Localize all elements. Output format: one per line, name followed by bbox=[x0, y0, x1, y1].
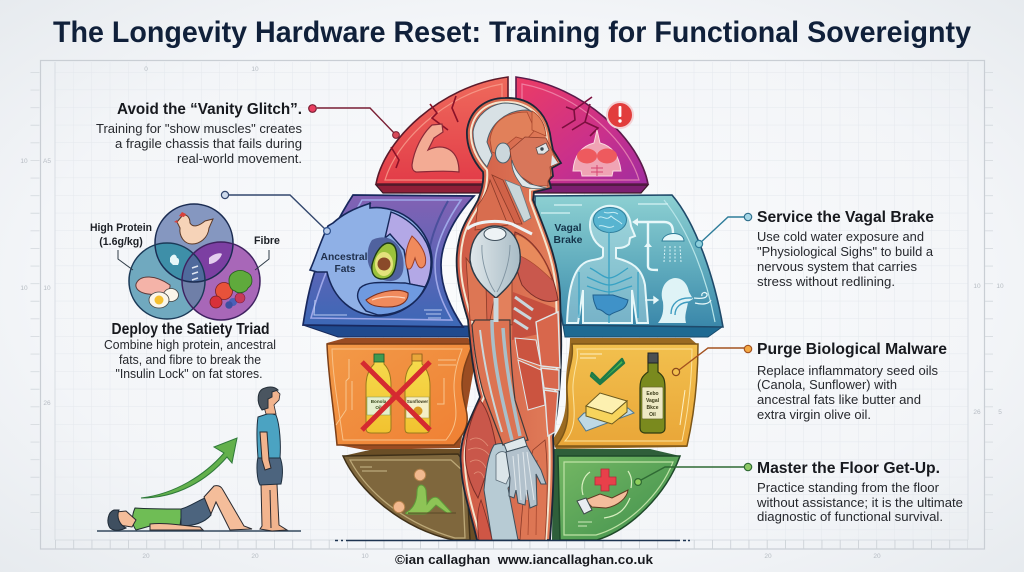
label: Vagal Brake: Vagal bbox=[554, 223, 582, 234]
text block: biological malware: (Canola, Sunflower) with bbox=[757, 378, 897, 392]
panel: vagal brake bbox=[535, 195, 723, 337]
decorative highlight strokes bbox=[314, 300, 442, 318]
connector: biological malware bbox=[672, 345, 752, 376]
icon: cracks in magenta dome bbox=[562, 97, 598, 136]
text block: biological malware bbox=[757, 341, 947, 422]
text block: vagal brake bbox=[757, 209, 934, 289]
text block: floor get-up: Master the Floor Get-Up. bbox=[757, 460, 940, 477]
icon: overlap glyphs bbox=[170, 255, 179, 265]
decorative highlight strokes bbox=[360, 467, 387, 471]
background: engineering grid panel: 10 bbox=[251, 66, 259, 73]
standing person bbox=[257, 387, 287, 531]
panel: vanity glitch dome, left bbox=[376, 77, 508, 193]
icon: avocado bbox=[372, 243, 397, 279]
title: The Longevity Hardware Reset: Training for Functional Sovereignty bbox=[53, 16, 972, 49]
text block: vagal brake: nervous system that carries bbox=[757, 260, 917, 274]
panel: seed oils bbox=[327, 338, 478, 450]
text block: vanity glitch: Avoid the “Vanity Glitch”. bbox=[117, 101, 302, 118]
text block: vanity glitch: a fragile chassis that fails during bbox=[115, 137, 302, 151]
illustration: floor get-up bbox=[97, 387, 301, 531]
arm: upper arm muscles bbox=[466, 258, 487, 322]
label: Vagal Brake bbox=[554, 223, 583, 246]
icon: butter bbox=[578, 393, 634, 431]
neck: tendons bbox=[492, 175, 522, 224]
text block: satiety triad: fats, and fibre to break the bbox=[119, 353, 261, 367]
arm: steel wrist band bbox=[504, 437, 527, 452]
text block: satiety triad: "Insulin Lock" on fat stores. bbox=[116, 367, 262, 381]
label: Vagal Brake: Brake bbox=[554, 235, 583, 246]
background: engineering grid panel: 20 bbox=[142, 553, 150, 560]
panel: ancestral fats bbox=[303, 195, 474, 337]
decorative highlight strokes bbox=[578, 522, 592, 526]
background: engineering grid panel: 10 bbox=[43, 285, 51, 292]
text block: vagal brake: "Physiological Sighs" to build a bbox=[757, 245, 933, 259]
text block: vagal brake: stress without redlining. bbox=[757, 275, 895, 289]
label: high protein: (1.6g/kg) bbox=[99, 236, 143, 248]
back: lower thigh and glute bbox=[465, 400, 496, 498]
icon: olive oil bottle: Bkce bbox=[647, 405, 659, 411]
lying person bbox=[108, 486, 252, 530]
text block: vagal brake: Service the Vagal Brake bbox=[757, 209, 934, 226]
icon: cold shower bbox=[632, 218, 684, 270]
icon: olive oil bottle bbox=[640, 353, 665, 433]
icon: care arc bbox=[582, 471, 632, 518]
icon: nervous system figure bbox=[567, 206, 648, 323]
background: engineering grid panel: 10 bbox=[361, 553, 369, 560]
background: engineering grid panel: 10 bbox=[996, 283, 1004, 290]
panel: healthy fats bbox=[552, 338, 698, 449]
text block: vanity glitch bbox=[96, 101, 302, 166]
leader: high protein bbox=[118, 250, 133, 270]
text block: satiety triad: Deploy the Satiety Triad bbox=[112, 321, 270, 338]
background: engineering grid panel: 26 bbox=[973, 409, 981, 416]
icon: sunflower oil bottle: Sunflower bbox=[407, 399, 428, 404]
icon: canola oil bottle: Oil bbox=[375, 405, 382, 410]
icon: red cross-out bbox=[362, 362, 430, 430]
icon: sunflower oil bottle bbox=[405, 354, 430, 433]
leg: steel hip and shin bbox=[484, 444, 520, 540]
connector: vagal brake bbox=[695, 213, 752, 248]
text block: floor get-up bbox=[756, 460, 963, 524]
panel: diagnostic (green) bbox=[552, 449, 680, 540]
icon: canola oil bottle: Bonola bbox=[371, 399, 387, 404]
decorative highlight strokes bbox=[541, 204, 668, 213]
leader: fibre bbox=[255, 250, 269, 270]
head: steel skull cap bbox=[473, 103, 545, 167]
chest: pectoral muscle bbox=[514, 232, 558, 301]
background: engineering grid panel: 20 bbox=[873, 553, 881, 560]
label: high protein bbox=[90, 222, 152, 248]
icon: green check bbox=[591, 359, 624, 384]
text block: satiety triad bbox=[104, 321, 276, 381]
leg: thigh muscles bbox=[520, 440, 547, 540]
icon: olive oil bottle: Eebo bbox=[646, 391, 659, 397]
label: Ancestral Fats: Fats bbox=[335, 264, 356, 275]
icon: chicken bbox=[174, 212, 213, 244]
panel: floor test (brown) bbox=[343, 449, 480, 540]
icon: vanity chest muscles bbox=[573, 130, 621, 176]
text block: satiety triad: Combine high protein, ancestral bbox=[104, 338, 276, 352]
background: engineering grid panel: 20 bbox=[251, 553, 259, 560]
base line bbox=[335, 540, 690, 542]
icon: ancestral fats circle bbox=[310, 203, 432, 316]
icon: person getting up bbox=[393, 469, 456, 514]
body silhouette bbox=[457, 98, 561, 540]
head: ear bbox=[496, 143, 510, 163]
icon: warning badge bbox=[607, 102, 633, 128]
text block: biological malware: ancestral fats like butter and bbox=[757, 393, 921, 407]
text block: vanity glitch: Training for "show muscles" creates bbox=[96, 122, 302, 136]
head: face plate bbox=[510, 137, 558, 186]
text block: biological malware: extra virgin olive oil. bbox=[757, 408, 871, 422]
text block: floor get-up: diagnostic of functional survival. bbox=[757, 510, 943, 524]
panel: vanity glitch dome, right bbox=[516, 77, 648, 193]
icon: salmon fillet bbox=[366, 290, 408, 307]
decorative circuit lines bbox=[336, 359, 456, 425]
icon: olive oil bottle: Oil bbox=[649, 412, 656, 418]
background: engineering grid panel: 20 bbox=[764, 553, 772, 560]
arm: steel shoulder bbox=[467, 221, 532, 322]
text block: biological malware: Replace inflammatory seed oils bbox=[757, 364, 938, 378]
head: cranium muscle bbox=[490, 112, 535, 155]
text block: vanity glitch: real-world movement. bbox=[177, 152, 302, 166]
text block: biological malware: Purge Biological Malware bbox=[757, 341, 947, 358]
background: engineering grid panel: 26 bbox=[43, 400, 51, 407]
torso: abdominal muscles bbox=[515, 312, 560, 436]
icon: open hand bbox=[577, 490, 628, 514]
background: engineering grid panel: A5 bbox=[43, 158, 51, 165]
text block: floor get-up: without assistance; it is the ultimate bbox=[756, 496, 963, 510]
connector: floor get-up bbox=[635, 463, 752, 485]
label: high protein: High Protein bbox=[90, 222, 152, 234]
torso: ribs bbox=[512, 292, 557, 340]
footer credit: ©ian callaghan www.iancallaghan.co.uk bbox=[395, 553, 653, 567]
background: engineering grid panel: 10 bbox=[973, 283, 981, 290]
green arrow bbox=[141, 438, 237, 498]
background: engineering grid panel: 10 bbox=[20, 285, 28, 292]
icon: flexed bicep bbox=[412, 124, 459, 172]
arm: forearm bbox=[472, 320, 528, 445]
floor line bbox=[97, 530, 301, 532]
icon: salmon steak bbox=[406, 236, 426, 269]
icon: canola oil bottle bbox=[366, 354, 391, 433]
venn diagram: satiety triad bbox=[118, 204, 269, 320]
icon: cracks in red dome bbox=[391, 96, 458, 168]
label: Ancestral Fats bbox=[320, 252, 368, 275]
background: engineering grid panel: 5 bbox=[998, 409, 1002, 416]
background: engineering grid panel: 0 bbox=[144, 66, 148, 73]
icon: breast and eggs bbox=[136, 277, 178, 308]
icon: red plus bbox=[595, 469, 616, 491]
connector: satiety triad bbox=[221, 191, 330, 234]
text block: floor get-up: Practice standing from the floor bbox=[757, 481, 939, 495]
arm: mechanical hand bbox=[506, 446, 546, 508]
label: Ancestral Fats: Ancestral bbox=[320, 252, 368, 263]
label: fibre: Fibre bbox=[254, 235, 280, 247]
connector: vanity glitch bbox=[309, 105, 399, 138]
overlap regions bbox=[156, 242, 232, 280]
icon: breathing head bbox=[645, 278, 711, 323]
text block: vagal brake: Use cold water exposure and bbox=[757, 230, 924, 244]
body inner outline bbox=[461, 102, 557, 540]
figure: anatomical body bbox=[457, 98, 561, 540]
background: engineering grid panel: 10 bbox=[20, 158, 28, 165]
icon: fruit and greens bbox=[210, 270, 252, 309]
icon: olive oil bottle: Vagal bbox=[646, 398, 660, 404]
decorative highlight strokes bbox=[580, 354, 685, 425]
